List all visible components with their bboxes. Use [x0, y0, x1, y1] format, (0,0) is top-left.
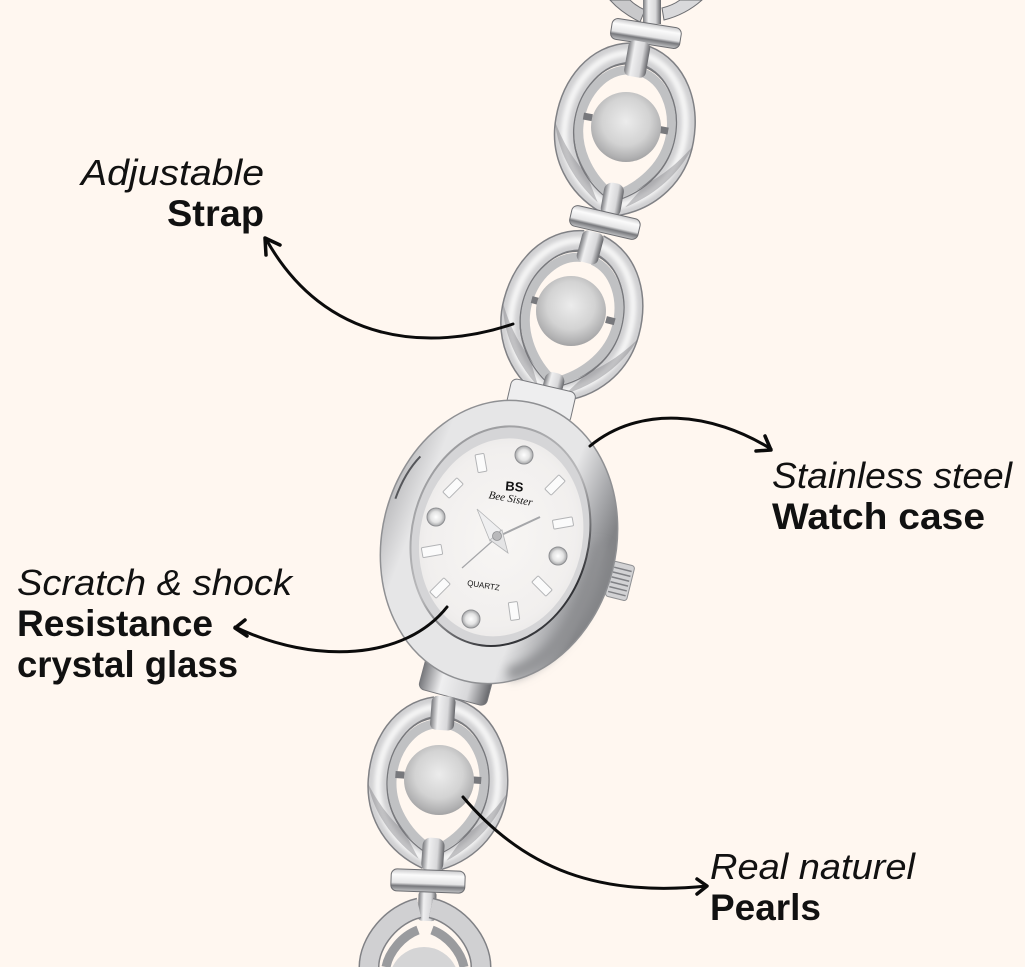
arrow: pearls [463, 797, 707, 894]
case lug: top [505, 378, 577, 424]
callout: crystal glass: crystal glass [17, 644, 238, 685]
pearl: third [404, 745, 474, 815]
pearl: first [591, 92, 661, 162]
arrow: watch case [590, 418, 771, 451]
brand logo: BS [505, 478, 524, 495]
callout: watch case [772, 455, 1013, 537]
callout: pearls [710, 846, 916, 928]
callout: pearls: Real naturel [710, 846, 916, 887]
watch dial markers [421, 453, 574, 621]
watch hands [462, 509, 540, 568]
bracelet link: first pearl [540, 29, 709, 229]
callout: adjustable strap: Strap [167, 193, 264, 234]
pearl: second [536, 276, 606, 346]
callout: adjustable strap: Adjustable [79, 152, 264, 193]
callout: crystal glass: Resistance [17, 603, 213, 644]
bracelet connector: top [610, 18, 682, 49]
bracelet link: second pearl [481, 214, 662, 420]
callout: pearls: Pearls [710, 887, 821, 928]
bracelet link: bottom partial [369, 908, 481, 967]
bracelet connector: second [568, 204, 641, 241]
bracelet connector: bottom [390, 869, 465, 922]
callout: watch case: Watch case [772, 496, 985, 537]
crown [605, 561, 635, 601]
dial gems [427, 446, 567, 628]
arrow: strap [265, 238, 513, 338]
quartz label: QUARTZ [467, 579, 500, 593]
watch bracelet and case [351, 0, 709, 967]
watch case [351, 375, 647, 709]
brand logo [488, 478, 534, 509]
callout: adjustable strap [79, 152, 264, 234]
pearl: bottom [392, 947, 456, 967]
callout: crystal glass: Scratch & shock [17, 562, 294, 603]
case lug: bottom [418, 656, 494, 707]
bracelet link: third pearl [362, 691, 514, 877]
arrow: crystal glass [235, 607, 447, 652]
bracelet link: top partial [610, 0, 702, 24]
brand logo: Bee Sister [488, 489, 534, 509]
callout: watch case: Stainless steel [772, 455, 1013, 496]
callout: crystal glass [17, 562, 294, 685]
